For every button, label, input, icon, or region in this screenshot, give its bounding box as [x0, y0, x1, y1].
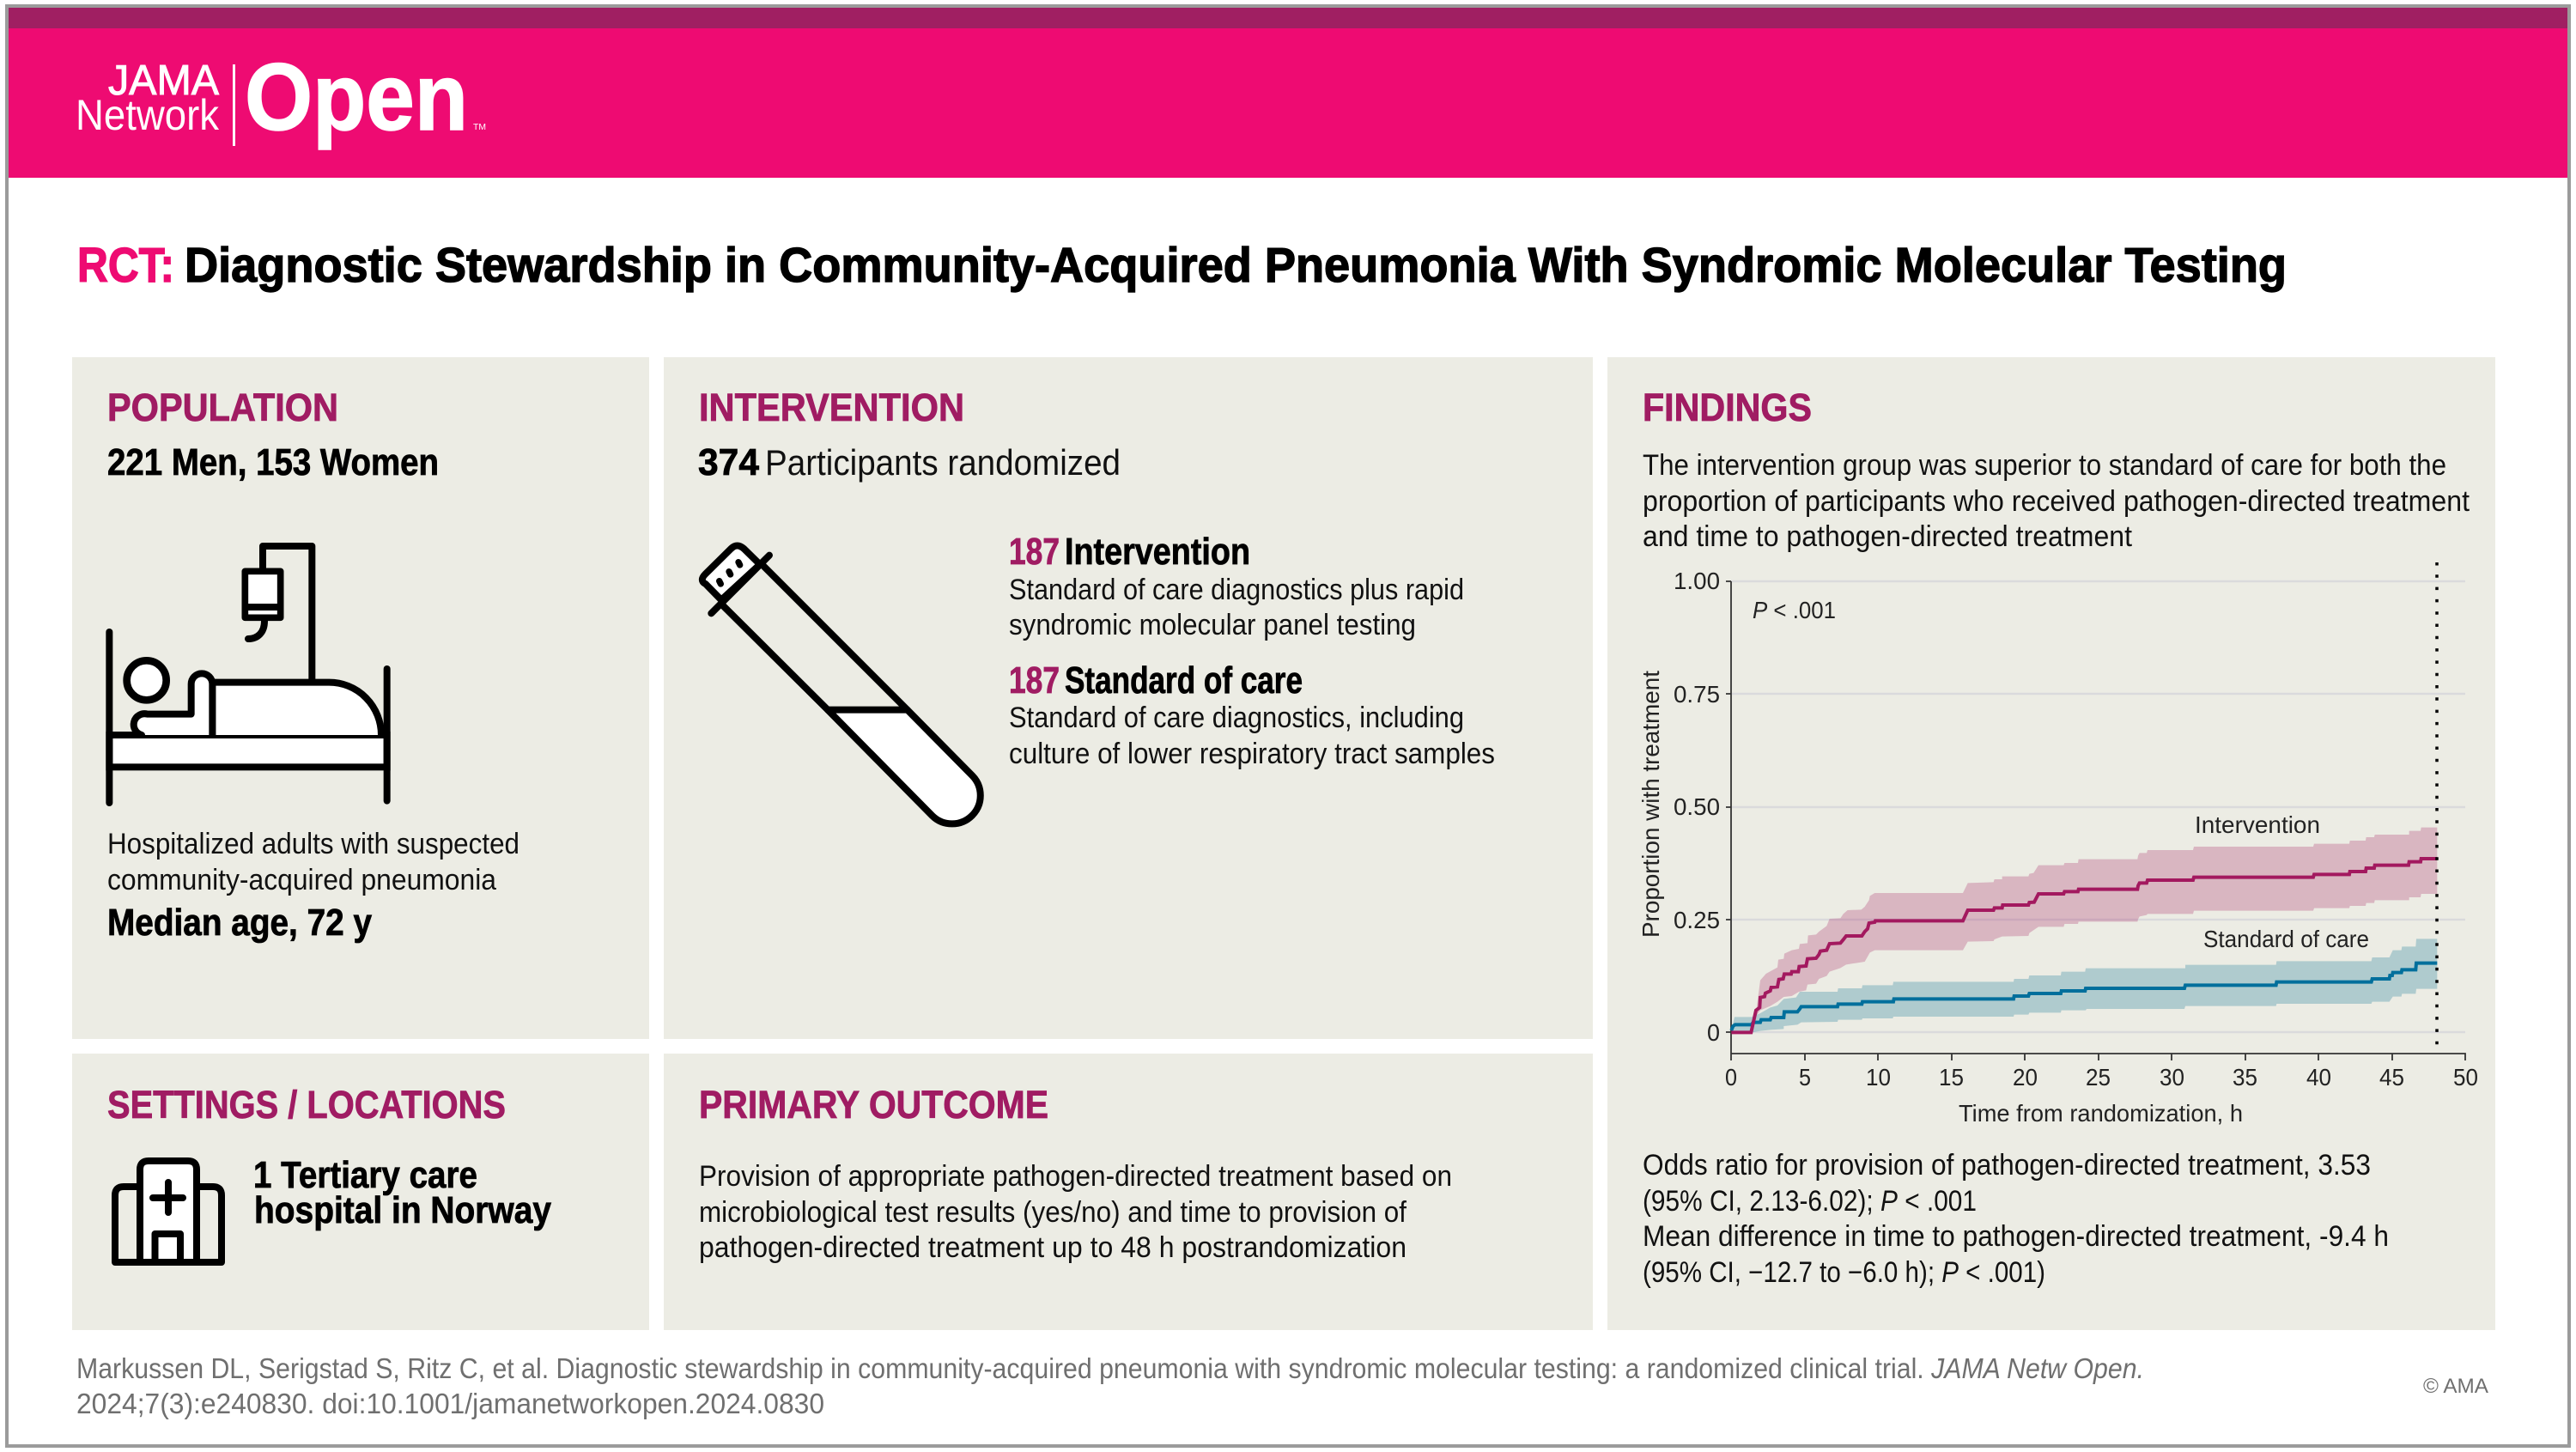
standard of care arm: Standard of care diagnostics, including: [1009, 702, 1464, 734]
x axis labels: 30: [2160, 1064, 2184, 1091]
x axis title: Time from randomization, h: [1959, 1100, 2243, 1127]
x axis labels: 0: [1725, 1064, 1737, 1091]
standard of care arm: culture of lower respiratory tract samples: [1009, 738, 1495, 770]
icon: test tube: [702, 545, 981, 823]
x axis labels: 20: [2013, 1064, 2038, 1091]
standard of care curve: [1731, 963, 2437, 1030]
findings statistics: (95% CI, −12.7 to −6.0 h); P < .001): [1643, 1256, 2045, 1289]
series label: intervention: Intervention: [2195, 811, 2320, 838]
standard of care arm: Standard of care: [1065, 659, 1303, 702]
x axis labels: 40: [2306, 1064, 2331, 1091]
intervention confidence band: [1752, 828, 2437, 1032]
y axis labels: 0.50: [1674, 793, 1720, 820]
intervention arm: Intervention: [1065, 531, 1250, 573]
y axis labels: 0: [1707, 1019, 1720, 1046]
participants randomized: Participants randomized: [765, 442, 1121, 483]
title: RCT:: [77, 238, 174, 293]
x axis labels: 10: [1866, 1064, 1891, 1091]
chart: cumulative proportion with treatment: [1637, 562, 2478, 1127]
median age: Median age, 72 y: [107, 902, 372, 944]
y axis labels: 1.00: [1674, 568, 1720, 594]
settings text: [253, 1154, 551, 1231]
heading: findings: FINDINGS: [1643, 386, 1812, 429]
population description: [107, 828, 519, 896]
primary outcome text: microbiological test results (yes/no) and time to provision of: [699, 1196, 1407, 1229]
copyright: © AMA: [2423, 1375, 2488, 1398]
findings summary: [1643, 449, 2470, 553]
participants randomized: 374: [698, 441, 760, 483]
standard of care confidence band: [1731, 939, 2437, 1032]
primary outcome text: [699, 1160, 1452, 1264]
panel: findings: [1607, 357, 2495, 1330]
standard of care arm: [1009, 659, 1495, 770]
findings summary: The intervention group was superior to standard of care for both the: [1643, 449, 2446, 482]
citation: 2024;7(3):e240830. doi:10.1001/jamanetworkopen.2024.0830: [76, 1388, 824, 1419]
series label: standard of care: Standard of care: [2203, 926, 2369, 952]
heading: population: POPULATION: [107, 386, 338, 429]
x axis labels: 25: [2086, 1064, 2111, 1091]
logo: JAMA Network Open: Open: [245, 45, 468, 150]
x axis labels: 15: [1939, 1064, 1964, 1091]
logo: JAMA Network Open: [76, 45, 486, 150]
population description: community-acquired pneumonia: [107, 864, 496, 896]
logo: JAMA Network Open: TM: [473, 123, 486, 132]
settings text: hospital in Norway: [254, 1189, 551, 1231]
primary outcome text: pathogen-directed treatment up to 48 h postrandomization: [699, 1231, 1406, 1264]
intervention arm: [1009, 531, 1464, 641]
population description: Hospitalized adults with suspected: [107, 828, 519, 860]
primary outcome text: Provision of appropriate pathogen-directed treatment based on: [699, 1160, 1452, 1193]
p value: P < .001: [1753, 597, 1836, 623]
title: Diagnostic Stewardship in Community-Acquired Pneumonia With Syndromic Molecular Testing: [185, 238, 2287, 293]
y axis title: Proportion with treatment: [1637, 671, 1664, 938]
findings statistics: Odds ratio for provision of pathogen-directed treatment, 3.53: [1643, 1149, 2371, 1182]
findings summary: proportion of participants who received pathogen-directed treatment: [1643, 485, 2470, 518]
panel: primary outcome: [664, 1054, 1593, 1330]
x axis labels: 35: [2233, 1064, 2257, 1091]
panel: settings and locations: [72, 1054, 649, 1330]
intervention curve: [1731, 859, 2437, 1032]
y axis labels: [1674, 568, 1720, 1046]
logo: JAMA Network Open: Network: [76, 91, 220, 139]
icon: hospital: [115, 1161, 222, 1262]
48-hour dotted reference line: [2435, 562, 2439, 1054]
y axis labels: 0.75: [1674, 681, 1720, 708]
intervention arm: Standard of care diagnostics plus rapid: [1009, 574, 1464, 606]
intervention arm: 187: [1009, 531, 1060, 573]
chart axes: [1726, 581, 2465, 1060]
population counts: 221 Men, 153 Women: [107, 441, 439, 483]
heading: settings: SETTINGS / LOCATIONS: [107, 1083, 506, 1127]
header band: [9, 8, 2567, 178]
x axis labels: 45: [2379, 1064, 2404, 1091]
standard of care arm: 187: [1009, 659, 1060, 702]
heading: intervention: INTERVENTION: [699, 386, 964, 429]
settings text: 1 Tertiary care: [253, 1154, 477, 1196]
findings summary: and time to pathogen-directed treatment: [1643, 520, 2133, 553]
panel: population: [72, 357, 649, 1039]
findings statistics: [1643, 1149, 2389, 1289]
citation: Markussen DL, Serigstad S, Ritz C, et al. Diagnostic stewardship in community-acquired pneumonia with syndromic molecular testing: a randomized clinical trial. JAMA Netw Open.: [76, 1352, 2144, 1384]
intervention arm: syndromic molecular panel testing: [1009, 609, 1416, 641]
y axis labels: 0.25: [1674, 907, 1720, 933]
findings statistics: (95% CI, 2.13-6.02); P < .001: [1643, 1185, 1977, 1218]
findings statistics: Mean difference in time to pathogen-directed treatment, -9.4 h: [1643, 1220, 2389, 1253]
citation: [76, 1352, 2144, 1419]
heading: primary outcome: PRIMARY OUTCOME: [699, 1083, 1048, 1127]
icon: patient in hospital bed with IV: [109, 546, 387, 803]
logo: JAMA Network Open: JAMA: [108, 58, 219, 104]
x axis labels: [1725, 1064, 2478, 1091]
x axis labels: 5: [1799, 1064, 1811, 1091]
x axis labels: 50: [2453, 1064, 2478, 1091]
panel: intervention: [664, 357, 1593, 1039]
confidence bands and curves: [1731, 828, 2437, 1032]
